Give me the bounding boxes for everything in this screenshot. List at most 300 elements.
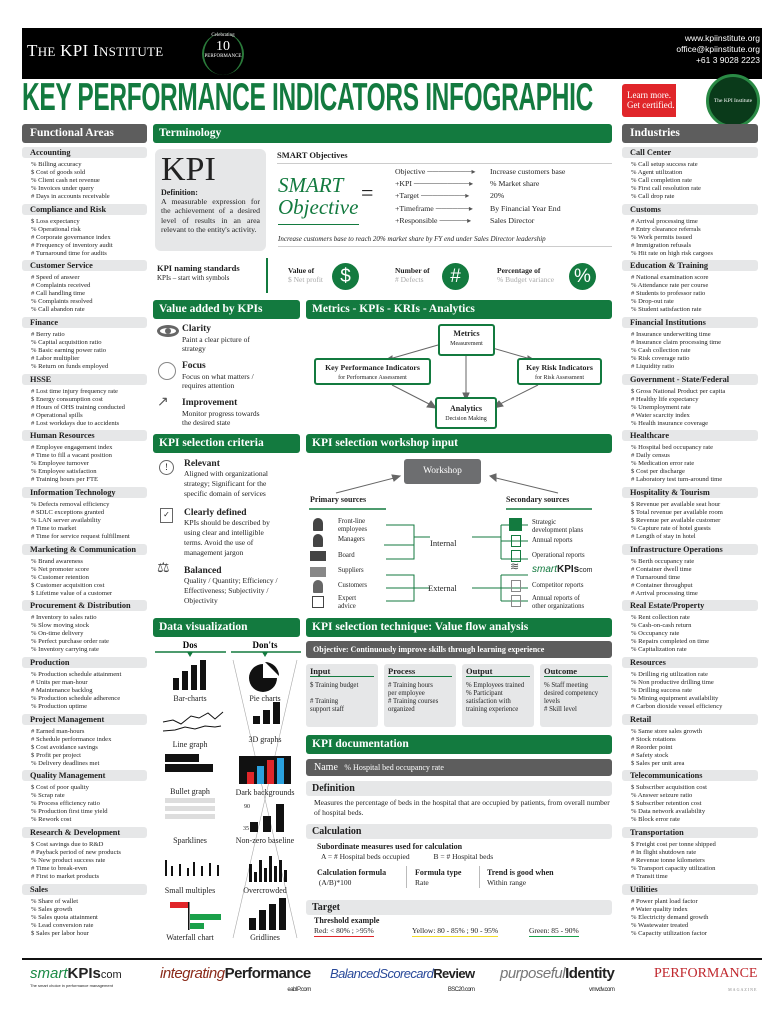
- block: finance: Finance: [30, 318, 58, 327]
- logo: BalancedScorecardReview: [330, 966, 474, 998]
- block: government: # Water scarcity index: [631, 412, 690, 419]
- KPI naming standards: KPIs – start with symbols: [157, 274, 229, 282]
- block: compliance: % Operational risk: [31, 226, 81, 233]
- block: telecom: $ Subscriber retention cost: [631, 800, 702, 807]
- panel: selection criteria: Objectivity: [184, 596, 218, 605]
- diagram: workshop input: development plans: [532, 526, 583, 534]
- SMART components list: 20%: [490, 191, 504, 200]
- heading: value flow analysis: [306, 618, 612, 637]
- box: metrics: [438, 324, 495, 356]
- block: financial institutions: Financial Institutions: [630, 318, 706, 327]
- block: government: $ Gross National Product per capita: [631, 388, 725, 395]
- block: retail: $ Sales per unit area: [631, 760, 684, 767]
- text: Formula type: [415, 868, 461, 877]
- diagram: workshop input: ≋: [510, 561, 519, 573]
- block: utilities: [622, 884, 758, 937]
- block: project management: # Earned man-hours: [31, 728, 84, 735]
- panel: data visualization dos and don'ts: Dark backgrounds: [236, 788, 294, 797]
- block: HSSE: $ Energy consumption cost: [31, 396, 103, 403]
- block: resources: % Mining equipment availability: [631, 695, 718, 702]
- diagram: workshop input: Board: [338, 552, 355, 559]
- block: HSSE: [22, 374, 147, 427]
- calculation: Calculation: [312, 826, 361, 837]
- block: utilities: % Wastewater treated: [631, 922, 688, 929]
- block: HSSE: # Operational spills: [31, 412, 83, 419]
- panel: KPI definition: A measurable expression for the achievement of a desired level of results in an area relevant to the entity's activity.: [161, 197, 260, 234]
- objective bar: [306, 641, 612, 658]
- block: telecom: $ Subscriber acquisition cost: [631, 784, 707, 791]
- block: utilities: % Capacity utilization factor: [631, 930, 707, 937]
- block: call center: % Agent utilization: [631, 169, 682, 176]
- number of: [395, 266, 430, 284]
- card: input: Input: [310, 666, 330, 676]
- diagram: workshop input: Front-line: [338, 518, 365, 525]
- name bar: Name % Hospital bed occupancy rate: [314, 762, 444, 773]
- logo: smartKPIs: [30, 966, 122, 988]
- block: education: # National examination score: [631, 274, 708, 281]
- icon: percent: %: [574, 266, 591, 287]
- text: Measures the percentage of beds in the hospital that are occupied by patients, from overall number of hospital beds.: [314, 798, 610, 816]
- label: internal: Internal: [430, 538, 456, 548]
- panel: value added: Focus on what matters /: [182, 372, 254, 380]
- card: input: $ Training budget: [310, 682, 358, 689]
- heading: value flow analysis: KPI selection technique: Value flow analysis: [312, 621, 528, 633]
- panel: value added: Paint a clear picture of: [182, 334, 250, 344]
- value of: $ Net profit: [288, 275, 323, 284]
- block: HR: % Employee satisfaction: [31, 468, 97, 475]
- block: compliance: # Turnaround time for audits: [31, 250, 107, 257]
- don'ts icons: [239, 662, 291, 930]
- card: output: satisfaction with: [466, 698, 511, 705]
- block: education: Education & Training: [630, 261, 708, 270]
- logo: purposefulIdentity: vmvdv.com: [589, 987, 614, 993]
- block: IT: Information Technology: [30, 488, 116, 497]
- panel: value added: Focus: [182, 361, 206, 371]
- block: infrastructure: % Berth occupancy rate: [631, 558, 694, 565]
- diagram: metrics: [306, 320, 612, 432]
- panel: data visualization dos and don'ts: 35: [243, 826, 249, 832]
- text: A = # Hospital beds occupied B = # Hospital beds: [321, 852, 493, 860]
- block: accounting: # Days in accounts receivable: [31, 193, 110, 200]
- secondary sources list: [506, 517, 610, 519]
- block: resources: % Non productive drilling time: [631, 679, 714, 686]
- box: KPIs: for Performance Assessment: [338, 375, 407, 381]
- diagram: workshop input: Customers: [338, 582, 367, 589]
- heading: workshop input: KPI selection workshop input: [312, 437, 458, 449]
- text: Red: < 80% ; >95%: [314, 926, 374, 935]
- logo: Performance Magazine: MAGAZINE: [728, 987, 757, 992]
- block: utilities: # Power plant load factor: [631, 898, 698, 905]
- number of: Number of: [395, 266, 430, 275]
- block: accounting: [22, 147, 147, 200]
- block: HR: % Employee turnover: [31, 460, 89, 467]
- text: Calculation formula: [317, 868, 386, 877]
- block: customs: # Immigration refusals: [631, 242, 691, 249]
- block: resources: % Drilling rig utilization rate: [631, 671, 708, 678]
- definition: [306, 781, 612, 796]
- logo: Performance Magazine: PERFORMANCE: [654, 966, 757, 981]
- callout: learn more: Learn more.: [627, 90, 671, 100]
- block: infrastructure: Infrastructure Operations: [630, 545, 723, 554]
- icon: crosshair: [158, 362, 176, 380]
- panel: KPI definition: [155, 149, 266, 251]
- panel: data visualization dos and don'ts: Gridlines: [250, 933, 280, 942]
- block: IT: # Time for service request fulfillment: [31, 533, 130, 540]
- panel: data visualization dos and don'ts: Small multiples: [165, 886, 215, 895]
- block: accounting: $ Cost of goods sold: [31, 169, 85, 176]
- primary sources list: [310, 517, 382, 519]
- block: transportation: $ Freight cost per tonne shipped: [631, 841, 716, 848]
- block: HSSE: # Lost time injury frequency rate: [31, 388, 118, 395]
- heading: KPI selection criteria: [153, 434, 300, 453]
- block: marketing: $ Lifetime value of a customer: [31, 590, 112, 597]
- box: analytics: Analytics: [450, 404, 482, 413]
- block: real estate: % Capitalization rate: [631, 646, 687, 653]
- callout: learn more: [622, 84, 676, 117]
- definition: Definition: [312, 783, 355, 794]
- name bar: [306, 759, 612, 776]
- value of: [288, 266, 323, 284]
- block: sales: % Sales growth: [31, 906, 72, 913]
- diagram: workshop input: [306, 455, 612, 613]
- block: compliance: $ Loss expectancy: [31, 218, 80, 225]
- text: Threshold example: [314, 916, 379, 925]
- block: customer service: [22, 260, 147, 313]
- text: Within range: [487, 878, 526, 886]
- icon: scales: ⚖: [157, 561, 170, 576]
- icon: dollar: $: [340, 266, 351, 287]
- card: outcome: # Skill level: [544, 706, 577, 713]
- block: hospitality: % Capture rate of hotel guests: [631, 525, 711, 532]
- target: Target: [312, 902, 340, 913]
- block: transportation: # Revenue tonne kilometers: [631, 857, 705, 864]
- block: procurement: % On-time delivery: [31, 630, 83, 637]
- block: IT: % Defects removal efficiency: [31, 501, 109, 508]
- block: call center: % Call drop rate: [631, 193, 674, 200]
- text: Subordinate measures used for calculation: [317, 842, 462, 851]
- logo: smartKPIs: smartKPIscom: [30, 965, 122, 982]
- block: real estate: [622, 600, 758, 653]
- panel: data visualization dos and don'ts: Waterfall chart: [166, 933, 215, 942]
- block: HR: Human Resources: [30, 431, 95, 440]
- panel: selection criteria: strategy; Significant for the: [184, 479, 266, 488]
- block: utilities: Utilities: [630, 885, 658, 894]
- panel: data visualization dos and don'ts: Pie charts: [249, 694, 281, 703]
- diagram: workshop input: Annual reports of: [532, 595, 580, 602]
- block: government: [622, 374, 758, 427]
- card: output: Output: [466, 666, 492, 676]
- block: transportation: Transportation: [630, 828, 684, 837]
- diagram: workshop input: Competitor reports: [532, 582, 584, 589]
- percentage of: Percentage of: [497, 266, 540, 275]
- block: project management: $ Cost avoidance savings: [31, 744, 98, 751]
- block: resources: Resources: [630, 658, 666, 667]
- badge: celebrating 10 years: [202, 33, 244, 75]
- block: retail: # Stock rotations: [631, 736, 676, 743]
- logo: integratingPerformance: eabIP.com: [287, 987, 311, 993]
- block: IT: % LAN server availability: [31, 517, 101, 524]
- logo: purposefulIdentity: [500, 966, 614, 998]
- panel: selection criteria: [155, 458, 300, 613]
- contact info: office@kpiinstitute.org: [676, 44, 760, 54]
- heading: terminology: Terminology: [159, 127, 221, 139]
- block: healthcare: % Medication error rate: [631, 460, 694, 467]
- block: customer service: Customer Service: [30, 261, 93, 270]
- block: IT: # SDLC exceptions granted: [31, 509, 104, 516]
- SMART example sentence: Increase customers base to reach 20% market share by FY end under Sales Director leadership: [278, 235, 546, 243]
- block: marketing: [22, 544, 147, 597]
- block: sales: % Sales quota attainment: [31, 914, 98, 921]
- block: production: % Production schedule attainment: [31, 671, 121, 678]
- icon: trend: ↗: [157, 395, 169, 410]
- badge: celebrating 10 years: PERFORMANCE: [205, 54, 241, 59]
- panel: data visualization dos and don'ts: Dos: [183, 640, 198, 650]
- block: quality: % Process efficiency ratio: [31, 800, 100, 807]
- logo: integratingPerformance: [160, 966, 311, 998]
- percentage of: % Budget variance: [497, 275, 554, 284]
- block: government: % Unemployment rate: [631, 404, 691, 411]
- block: procurement: Procurement & Distribution: [30, 601, 131, 610]
- block: hospitality: [622, 487, 758, 540]
- diagram: workshop input: Annual reports: [532, 537, 573, 544]
- block: HR: [22, 430, 147, 483]
- block: R&D: [22, 827, 147, 880]
- heading: industries: Industries: [630, 127, 680, 139]
- panel: selection criteria: Balanced: [184, 566, 221, 576]
- block: financial institutions: # Liquidity ratio: [631, 363, 674, 370]
- panel: value added: Improvement: [182, 398, 237, 408]
- card: output: [462, 664, 534, 727]
- objective bar: Objective: Continuously improve skills through learning experience: [313, 645, 544, 654]
- header bar: [22, 28, 762, 79]
- block: project management: % Delivery deadlines met: [31, 760, 99, 767]
- panel: data visualization dos and don'ts: Don'ts: [252, 640, 278, 650]
- block: compliance: # Corporate governance index: [31, 234, 111, 241]
- panel: selection criteria: management jargon: [184, 548, 243, 557]
- block: resources: # Carbon dioxide vessel efficiency: [631, 703, 722, 710]
- icon: hash: #: [450, 266, 461, 287]
- block: compliance: Compliance and Risk: [30, 205, 106, 214]
- block: financial institutions: # Insurance claim processing time: [631, 339, 721, 346]
- block: healthcare: [622, 430, 758, 483]
- block: hospitality: $ Total revenue per available room: [631, 509, 723, 516]
- icon: exclamation: !: [165, 462, 168, 472]
- box: workshop: Workshop: [423, 466, 462, 476]
- block: HR: # Employee engagement index: [31, 444, 112, 451]
- panel: data visualization dos and don'ts: Overcrowded: [243, 886, 287, 895]
- diagram: workshop input: Strategic: [532, 519, 556, 526]
- SMART components list: +Timeframe ──────▸: [395, 204, 473, 213]
- block: project management: $ Profit per project: [31, 752, 81, 759]
- block: quality: % Rework cost: [31, 816, 71, 823]
- box: KPIs: Key Performance Indicators: [325, 363, 420, 372]
- card: process: per employee: [388, 690, 425, 697]
- card: outcome: Outcome: [544, 666, 577, 676]
- SMART components list: Increase customers base: [490, 167, 565, 176]
- block: financial institutions: # Insurance underwriting time: [631, 331, 711, 338]
- panel: value added: requires attention: [182, 381, 234, 390]
- block: HSSE: # Hours of OHS training conducted: [31, 404, 125, 411]
- diagram: workshop input: other organizations: [532, 602, 584, 610]
- block: sales: % Lead conversion rate: [31, 922, 93, 929]
- block: HSSE: # Lost workdays due to accidents: [31, 420, 119, 427]
- block: customer service: % Call abandon rate: [31, 306, 85, 313]
- box: analytics: Decision Making: [445, 416, 487, 422]
- block: hospitality: Hospitality & Tourism: [630, 488, 710, 497]
- card: outcome: desired competency: [544, 690, 598, 697]
- block: education: % Attendance rate per course: [631, 282, 708, 289]
- block: accounting: % Client cash net revenue: [31, 177, 100, 184]
- panel: data visualization dos and don'ts: [153, 638, 303, 946]
- block: R&D: % New product success rate: [31, 857, 105, 864]
- block: customer service: % Complaints resolved: [31, 298, 93, 305]
- block: finance: # Labor multiplier: [31, 355, 79, 362]
- block: accounting: Accounting: [30, 148, 71, 157]
- block: infrastructure: # Container dwell time: [631, 566, 692, 573]
- block: infrastructure: # Turnaround time: [631, 574, 680, 581]
- block: sales: % Share of wallet: [31, 898, 78, 905]
- icon: document check: ✓: [163, 510, 170, 519]
- block: compliance: # Frequency of inventory audit: [31, 242, 113, 249]
- heading: metrics: [306, 300, 612, 319]
- block: quality: [22, 770, 147, 823]
- heading: industries: [622, 124, 758, 143]
- block: production: # Units per man-hour: [31, 679, 88, 686]
- block: HSSE: HSSE: [30, 375, 51, 384]
- card: input: [306, 664, 378, 727]
- block: procurement: % Inventory carrying rate: [31, 646, 99, 653]
- box: KRIs: Key Risk Indicators: [526, 363, 593, 372]
- block: hospitality: # Length of stay in hotel: [631, 533, 696, 540]
- logo: integratingPerformance: integratingPerformance: [160, 965, 311, 982]
- block: telecom: % Data network availability: [631, 808, 705, 815]
- panel: selection criteria: Relevant: [184, 459, 220, 469]
- card: output: % Employees trained: [466, 682, 524, 689]
- number of: # Defects: [395, 275, 424, 284]
- block: procurement: # Inventory to sales ratio: [31, 614, 97, 621]
- block: call center: [622, 147, 758, 200]
- block: call center: % Call completion rate: [631, 177, 692, 184]
- block: real estate: % Repairs completed on time: [631, 638, 709, 645]
- value of: Value of: [288, 266, 314, 275]
- calculation: [306, 824, 612, 839]
- heading: value added by KPIs: [153, 300, 300, 319]
- dos icons: [163, 660, 223, 930]
- logo: The KPI Institute: THE KPI INSTITUTE: [27, 41, 163, 60]
- block: financial institutions: % Risk coverage ratio: [631, 355, 689, 362]
- heading: data visualization: [153, 618, 300, 637]
- card: process: organized: [388, 706, 415, 713]
- block: transportation: # Transit time: [631, 873, 668, 880]
- heading: workshop input: [306, 434, 612, 453]
- icon: certified badge: [706, 74, 760, 128]
- icon: document check: [160, 508, 173, 523]
- block: transportation: % Transport capacity utilization: [631, 865, 715, 872]
- block: IT: # Time to market: [31, 525, 76, 532]
- block: finance: % Return on funds employed: [31, 363, 108, 370]
- block: resources: % Drilling success rate: [631, 687, 692, 694]
- block: government: # Healthy life expectancy: [631, 396, 699, 403]
- panel: selection criteria: Effectiveness; Subjectivity /: [184, 586, 268, 595]
- panel: selection criteria: Clearly defined: [184, 508, 247, 518]
- block: retail: Retail: [630, 715, 651, 724]
- heading: functional areas: Functional Areas: [30, 127, 114, 139]
- diagram: workshop input: employees: [338, 526, 367, 532]
- footer divider: [22, 958, 762, 960]
- card: process: # Training courses: [388, 698, 438, 705]
- block: telecom: % Block error rate: [631, 816, 680, 823]
- block: call center: Call Center: [630, 148, 671, 157]
- text: Rate: [415, 878, 429, 886]
- block: utilities: # Water quality index: [631, 906, 688, 913]
- card: outcome: levels: [544, 698, 560, 705]
- block: customer service: # Call handling time: [31, 290, 85, 297]
- SMART components list: Objective ────────▸: [395, 167, 475, 176]
- KPI naming standards: [157, 258, 596, 293]
- heading: KPI documentation: KPI documentation: [312, 738, 409, 750]
- SMART components list: +Responsible ─────▸: [395, 216, 471, 225]
- text: Trend is good when: [487, 868, 554, 877]
- block: marketing: % Net promoter score: [31, 566, 89, 573]
- panel: selection criteria: using clear and intelligible: [184, 528, 264, 537]
- panel: data visualization dos and don'ts: Sparklines: [173, 836, 207, 845]
- logo: smartKPIs: The smart choice in performance management: [30, 983, 113, 988]
- block: production: % Production schedule adherence: [31, 695, 120, 702]
- block: real estate: % Occupancy rate: [631, 630, 679, 637]
- card: output: % Participant: [466, 690, 503, 697]
- block: education: % Drop-out rate: [631, 298, 674, 305]
- block: finance: % Capital acquisition ratio: [31, 339, 102, 346]
- block: healthcare: # Daily census: [631, 452, 670, 459]
- block: hospitality: $ Revenue per available seat hour: [631, 501, 720, 508]
- block: finance: # Berry ratio: [31, 331, 65, 338]
- panel: SMART objectives: =: [361, 180, 373, 205]
- panel: SMART objectives: [277, 150, 612, 247]
- panel: SMART objectives: SMART Objectives: [277, 150, 348, 160]
- block: production: # Maintenance backlog: [31, 687, 93, 694]
- diagram: workshop input: Operational reports: [532, 552, 585, 559]
- block: customs: % Work permits issued: [631, 234, 692, 241]
- panel: value added: the desired state: [182, 418, 230, 427]
- block: retail: # Reorder point: [631, 744, 672, 751]
- panel: value added: Clarity: [182, 324, 211, 334]
- card: output: training experience: [466, 706, 518, 713]
- block: R&D: $ Cost savings due to R&D: [31, 841, 103, 848]
- block: procurement: [22, 600, 147, 653]
- block: quality: % Production first time yield: [31, 808, 108, 815]
- block: marketing: % Customer retention: [31, 574, 89, 581]
- heading: data visualization: Data visualization: [159, 621, 248, 633]
- block: hospitality: $ Revenue per available customer: [631, 517, 720, 524]
- block: education: # Students to professor ratio: [631, 290, 705, 297]
- block: R&D: # Payback period of new products: [31, 849, 121, 856]
- card: process: # Training hours: [388, 682, 433, 689]
- panel: value added: strategy: [182, 344, 206, 353]
- heading: terminology: [153, 124, 612, 143]
- block: infrastructure: # Arrival processing time: [631, 590, 698, 597]
- block: real estate: % Cash-on-cash return: [631, 622, 691, 629]
- label: primary sources: Primary sources: [310, 495, 366, 504]
- block: healthcare: % Hospital bed occupancy rate: [631, 444, 713, 451]
- panel: selection criteria: terms. Avoid the use of: [184, 538, 253, 547]
- block: HR: # Time to fill a vacant position: [31, 452, 112, 459]
- logo: BalancedScorecardReview: BalancedScorecardReview: [330, 966, 474, 981]
- block: procurement: % Perfect purchase order rate: [31, 638, 109, 645]
- panel: selection criteria: Quality / Quantity; Efficiency /: [184, 576, 278, 585]
- callout: learn more: Get certified.: [627, 100, 674, 110]
- block: production: % Production uptime: [31, 703, 87, 710]
- block: finance: % Basic earning power ratio: [31, 347, 106, 354]
